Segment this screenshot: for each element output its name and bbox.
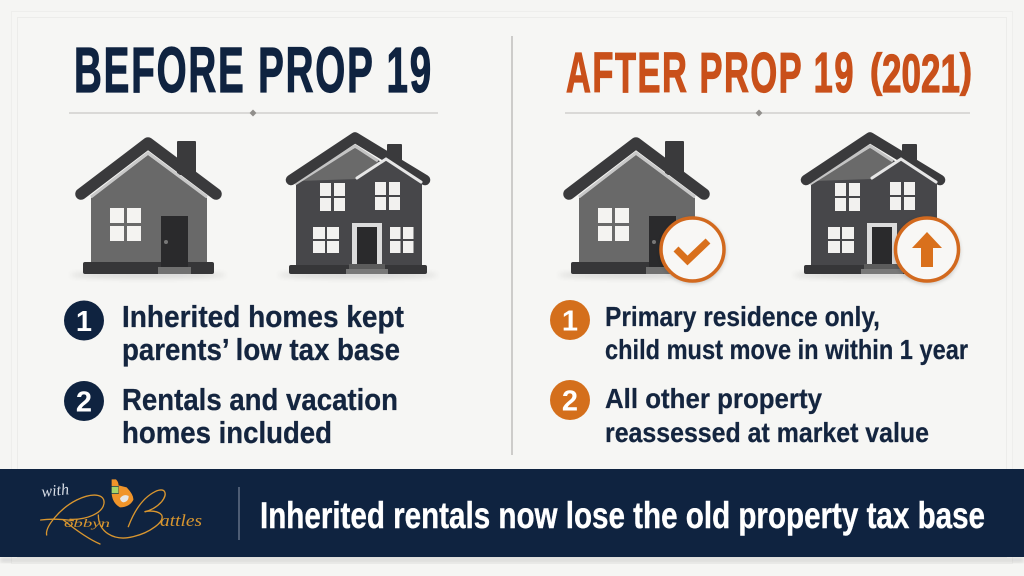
text: primary residence: Primary residence only, (605, 301, 880, 332)
heading: after prop 19: ) (960, 44, 972, 96)
text: primary residence: child must move in within 1 year (605, 334, 968, 365)
number badge 2 (550, 380, 590, 420)
panel: after prop 19 (550, 41, 972, 448)
text: rentals and vacation: homes included (122, 415, 332, 450)
logo: Robbyn Battles: attles (160, 511, 202, 530)
text: all other property: All other property (605, 383, 822, 414)
heading: after prop 19: 2021 (882, 44, 960, 104)
text: all other property: reassessed at market value (605, 417, 929, 448)
logo: Robbyn Battles: with (41, 481, 70, 501)
number badge 2: 2 (562, 386, 578, 418)
number badge 1 (550, 300, 590, 340)
footer banner (0, 469, 1024, 562)
number badge 1: 1 (76, 306, 92, 338)
number badge 2: 2 (76, 386, 92, 418)
text: rentals and vacation: Rentals and vacation (122, 382, 398, 417)
number badge 2 (64, 381, 104, 421)
heading: before prop 19: BEFORE PROP 19 (74, 34, 433, 106)
heading: after prop 19: ( (870, 44, 883, 96)
icon: small house (70, 141, 226, 278)
logo: Robbyn Battles: obbyn (64, 516, 110, 530)
icon: two-storey house (278, 138, 438, 278)
number badge 1: 1 (562, 306, 578, 338)
icon: small house with check (558, 141, 726, 284)
panel: before prop 19 (64, 34, 438, 450)
logo: Robbyn Battles (41, 479, 202, 544)
text: inherited homes: Inherited homes kept (122, 299, 404, 334)
text: inherited homes: parents’ low tax base (122, 332, 400, 367)
number badge 1 (64, 300, 104, 340)
icon: large house with up arrow (793, 138, 960, 284)
